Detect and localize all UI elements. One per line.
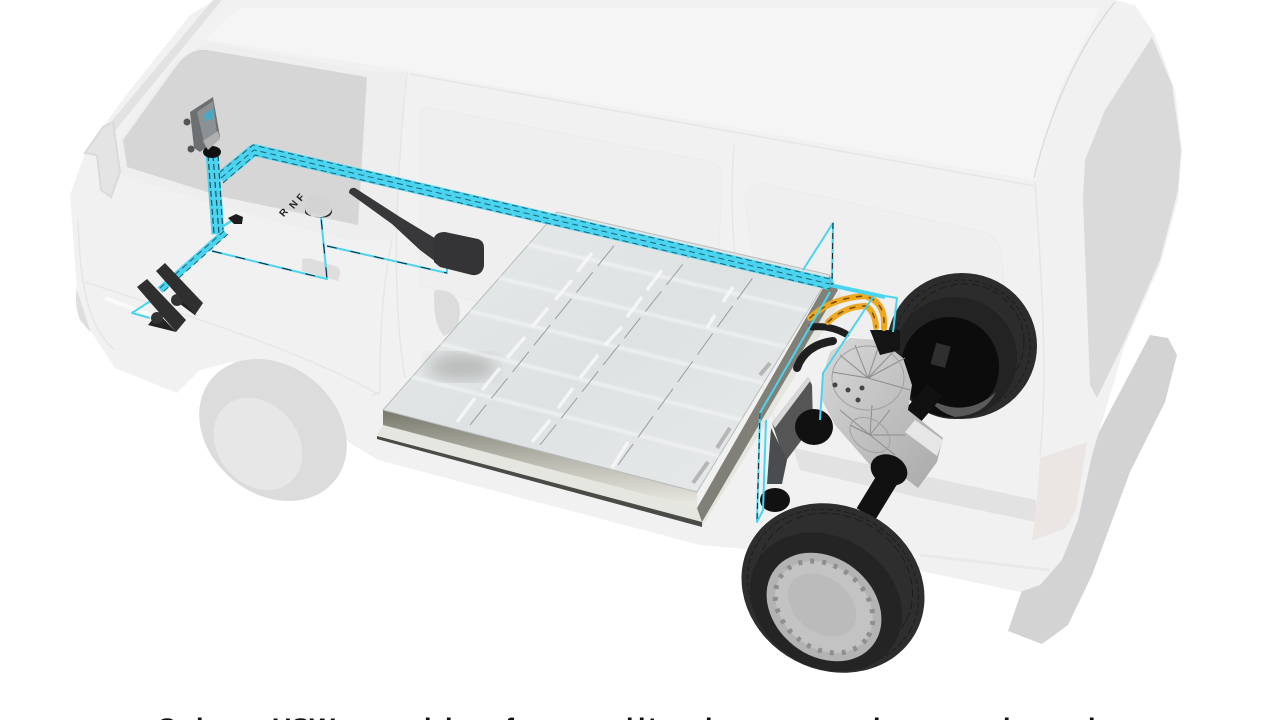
radiator fan hub: [795, 409, 833, 445]
cargo panel recess right: [745, 184, 1010, 360]
cell highlights: [457, 253, 733, 468]
gear labels: R: [278, 206, 291, 219]
dark cell patch: [428, 354, 496, 380]
lower bumper stripe: [920, 555, 1050, 570]
battery front face: [383, 410, 697, 508]
battery pack: [377, 212, 842, 527]
pedal bases: [148, 313, 176, 332]
wing mirror: [85, 122, 120, 197]
radiator foot: [760, 488, 790, 512]
cargo panel recess left: [420, 108, 722, 340]
gear selector dial: [278, 192, 332, 219]
tray dark edge: [377, 436, 702, 527]
wheel rim: [745, 530, 903, 684]
main data bus band: [220, 150, 830, 284]
cell rows: [412, 245, 808, 456]
cab door frame: [120, 42, 405, 240]
casing top plate: [905, 420, 943, 456]
roof pillar stripe: [85, 0, 222, 155]
door and panel seams: [78, 2, 1115, 455]
door handle: [302, 258, 340, 281]
cab window: [123, 50, 367, 225]
rear window: [1083, 37, 1181, 398]
axle flange: [865, 448, 913, 492]
band taper to junction: [830, 285, 885, 297]
rear wheel: [887, 273, 1037, 419]
cell column seams: [470, 232, 762, 465]
vertical band from controller: [212, 152, 218, 234]
rear mud flap and ghost rear wheel: [1008, 335, 1177, 644]
selector and brake wires: [212, 217, 447, 279]
pedals: [137, 263, 203, 332]
orange high voltage cables: [810, 296, 884, 328]
control unit screen: [204, 108, 214, 122]
tail light: [1032, 442, 1087, 541]
sliding door handle: [434, 290, 460, 336]
control unit: [184, 97, 221, 158]
battery top face: [383, 212, 830, 492]
rear axle: [905, 390, 935, 425]
sensor stub: [222, 219, 234, 227]
sensor connector: [228, 214, 243, 224]
radiator bracket: [767, 428, 787, 484]
front bumper end: [76, 285, 92, 332]
battery side strip: [697, 276, 838, 522]
battery tray: [377, 290, 842, 527]
radiator: [760, 377, 833, 512]
motor and gearbox: [822, 330, 943, 514]
accelerator pedal: [156, 263, 203, 315]
roof panel highlight: [205, 8, 1100, 180]
hand brake lever: [349, 188, 484, 275]
brake pedal: [137, 279, 186, 332]
gearbox bolts: [832, 382, 864, 402]
gear labels: [278, 192, 307, 219]
ghost front wheel: [171, 330, 375, 530]
axle stub: [866, 478, 888, 514]
coolant hoses: [797, 327, 846, 368]
silver casing: [822, 338, 943, 488]
front wheel: [712, 471, 954, 705]
casing ribs: [832, 342, 910, 460]
van body: [70, 0, 1182, 592]
gear labels: N: [288, 199, 301, 211]
grey cell markers: [693, 363, 770, 483]
band to pedals: [160, 232, 225, 290]
rear body lower stripe: [793, 448, 1036, 522]
wiring harness: [132, 145, 897, 522]
gear labels: F: [295, 192, 307, 204]
pedal loop: [132, 298, 155, 318]
high voltage connector block: [870, 330, 900, 355]
rear junction wires: [803, 223, 897, 332]
